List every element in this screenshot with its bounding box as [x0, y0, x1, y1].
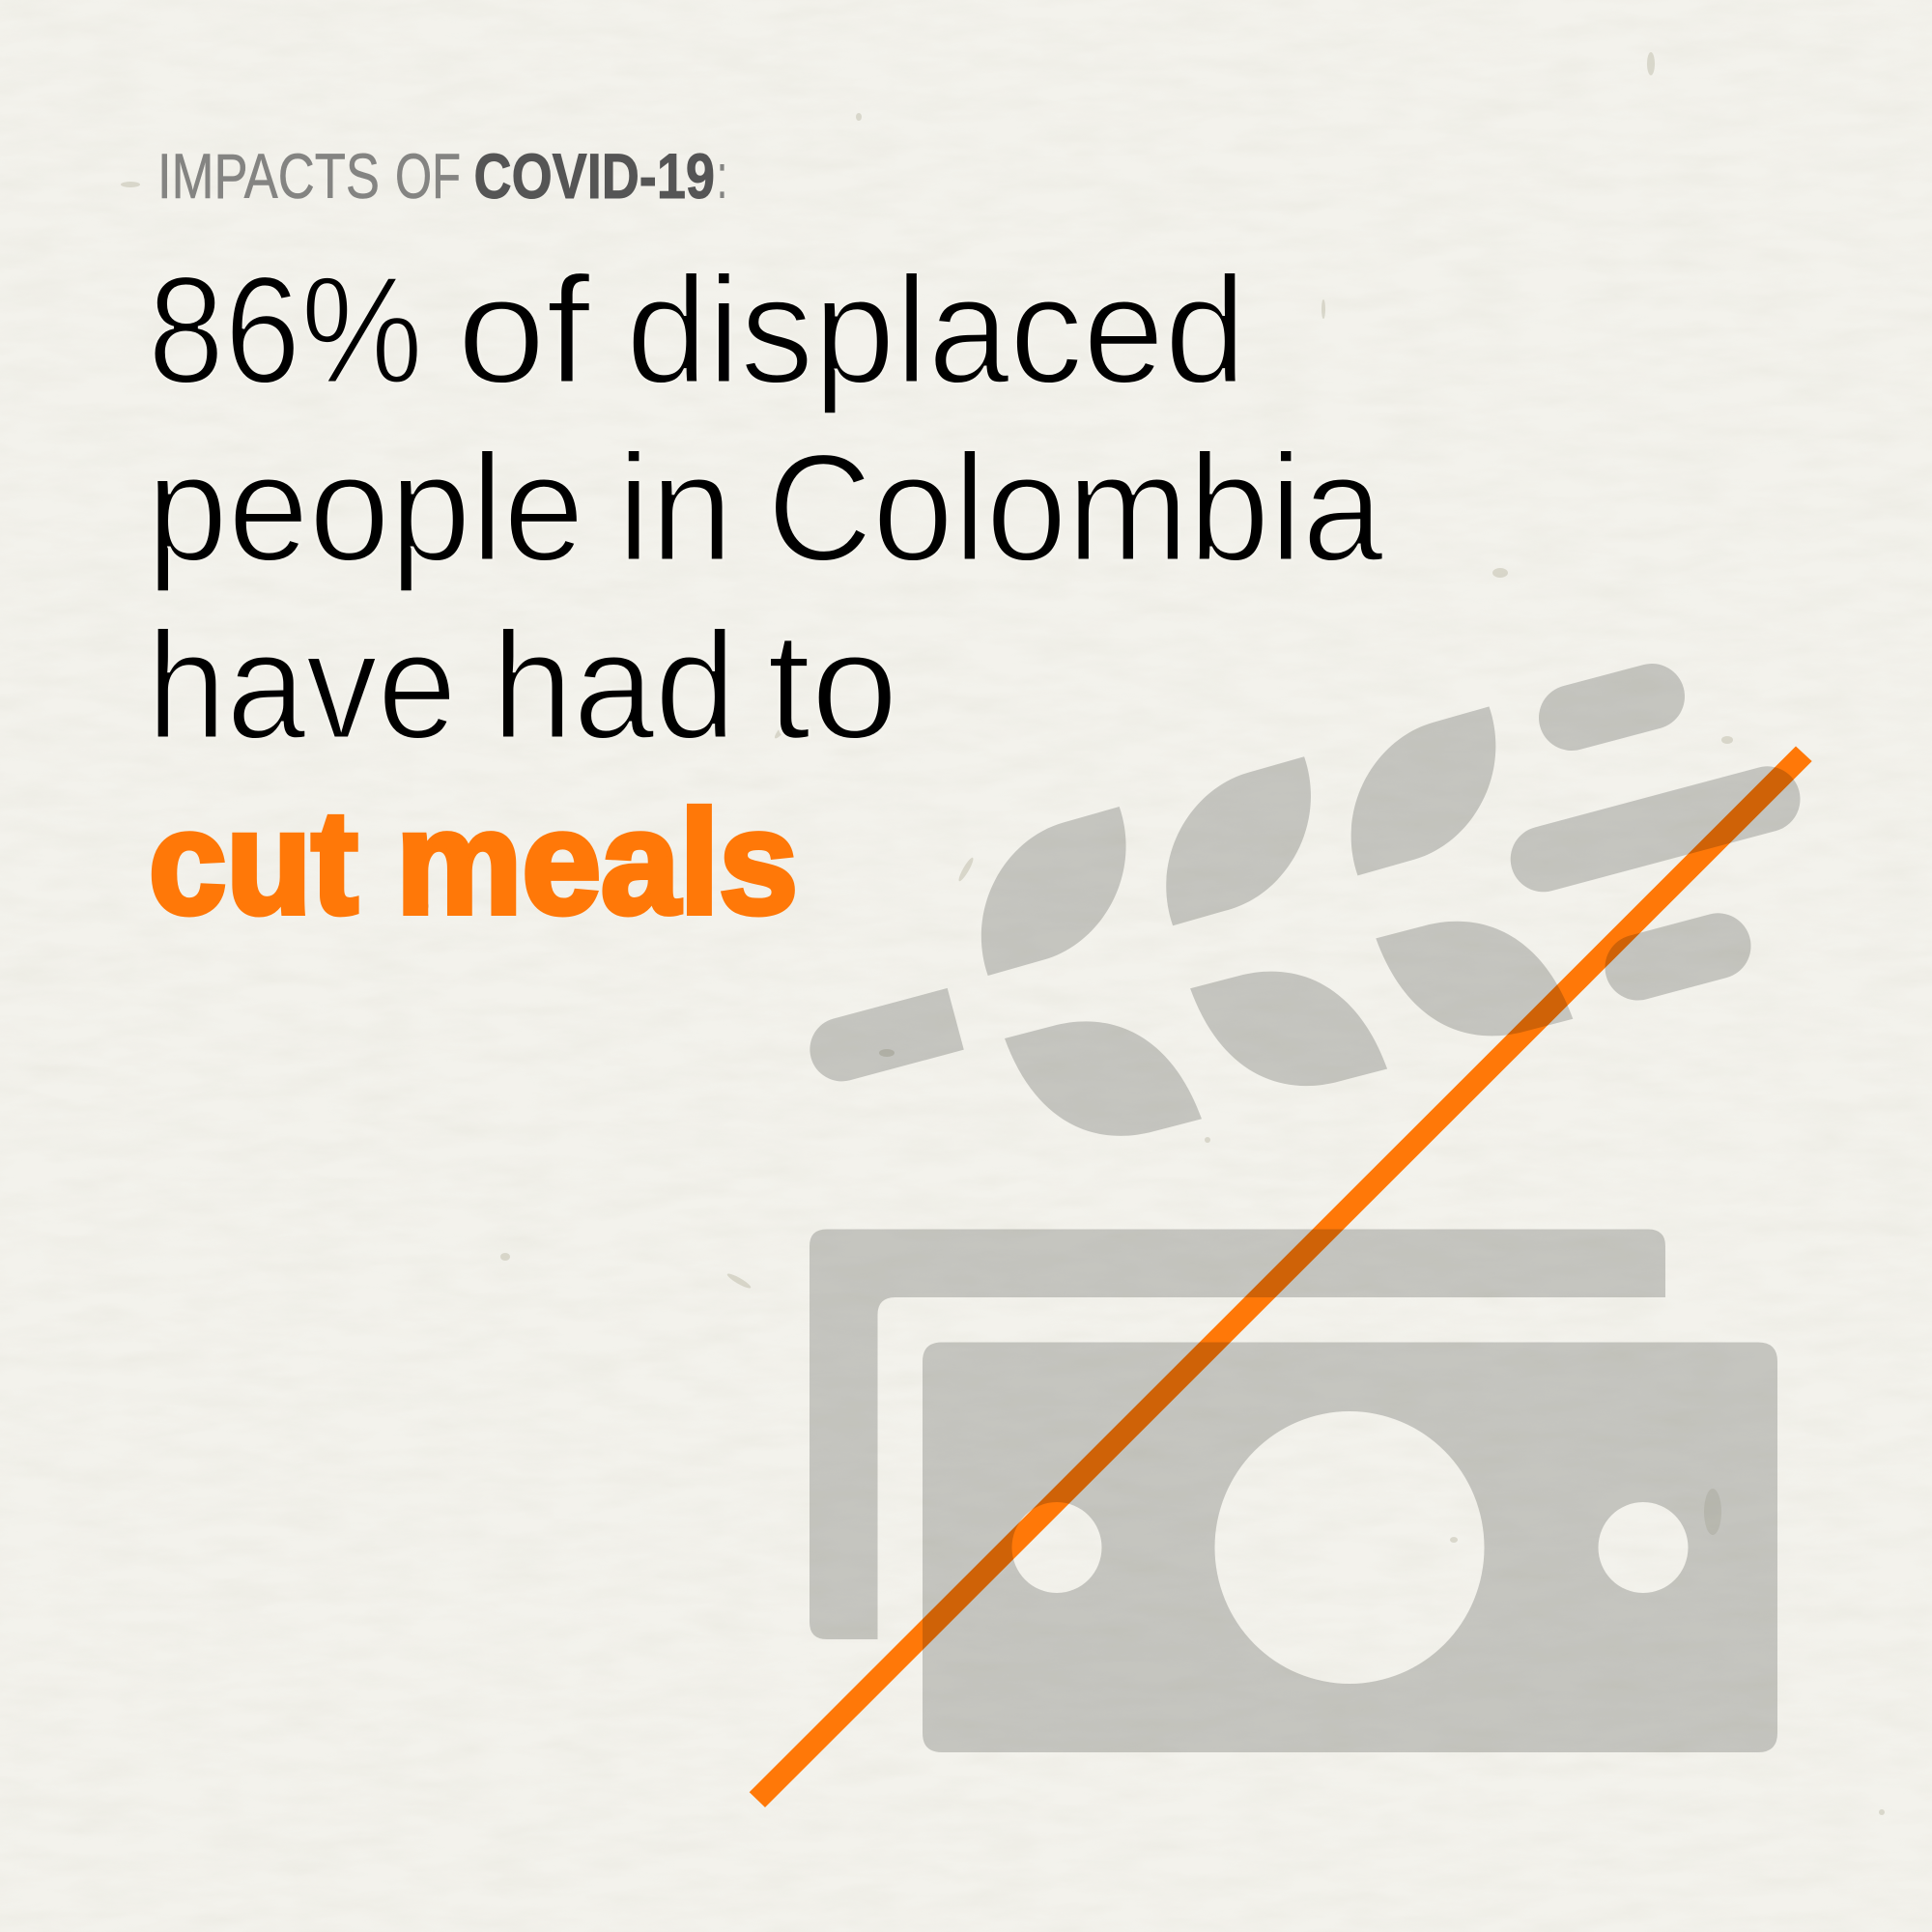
wheat top pill long: [1544, 799, 1768, 859]
wheat grain lower 2: [1190, 972, 1387, 1086]
eyebrow heading: impacts of COVID-19: OF: [395, 140, 461, 212]
icon: front banknote with circles: [923, 1343, 1777, 1752]
headline statistic text: of: [457, 245, 591, 415]
highlighted phrase: cut meals: [149, 781, 798, 945]
headline statistic text: displaced: [626, 245, 1246, 415]
headline statistic text: have: [147, 601, 457, 771]
eyebrow heading: impacts of COVID-19: IMPACTS: [157, 140, 380, 212]
headline statistic text: [147, 245, 1383, 771]
wheat grain upper 3: [1351, 706, 1495, 875]
icon: back banknote: [810, 1229, 1665, 1639]
headline statistic text: in: [617, 423, 733, 593]
icon: wheat stalk: [803, 696, 1768, 1136]
wheat grain upper 1: [981, 807, 1126, 976]
icon: wheat grain and banknotes: [803, 696, 1777, 1752]
highlighted phrase: cut meals: meals: [396, 781, 798, 945]
wheat stem base: [803, 988, 964, 1089]
wheat grain lower 1: [1005, 1021, 1202, 1136]
eyebrow heading: impacts of COVID-19: :: [717, 140, 728, 212]
headline statistic text: 86%: [148, 245, 423, 415]
eyebrow heading: impacts of COVID-19: COVID-19: [473, 140, 715, 212]
orange strike-through slash: [750, 746, 1812, 1807]
wheat top pill short: [1572, 696, 1652, 718]
eyebrow heading: impacts of COVID-19: [157, 140, 728, 212]
headline statistic text: had: [492, 601, 736, 771]
wheat top pill lower: [1638, 946, 1718, 968]
highlighted phrase: cut meals: cut: [149, 781, 357, 945]
headline statistic text: people: [147, 423, 584, 593]
headline statistic text: Colombia: [767, 423, 1383, 593]
headline statistic text: to: [767, 601, 898, 771]
wheat grain lower 3: [1376, 922, 1573, 1036]
wheat grain upper 2: [1166, 756, 1311, 925]
